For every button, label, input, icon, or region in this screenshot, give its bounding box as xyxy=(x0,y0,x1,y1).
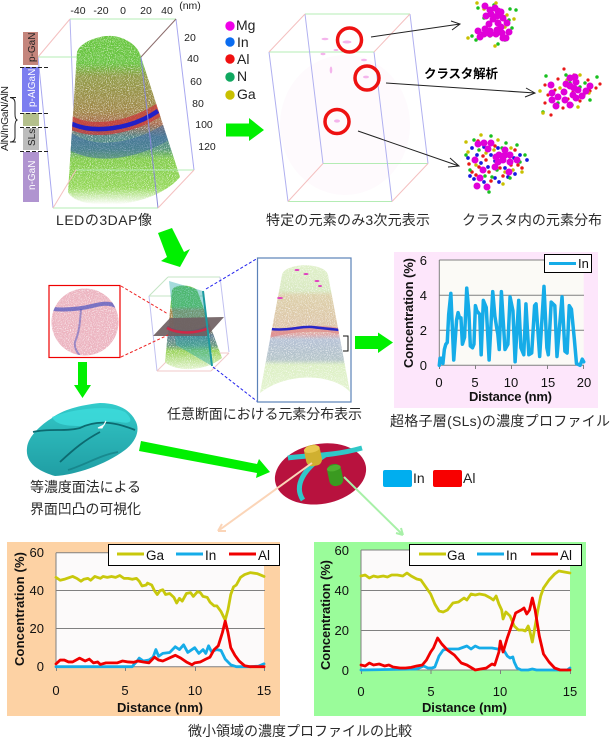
layer: SLs: SLs xyxy=(27,129,38,146)
x axis labels: 15 xyxy=(541,375,555,390)
legend xyxy=(108,544,280,566)
depth scale right: 120 xyxy=(198,141,216,153)
legend: Ga: Ga xyxy=(237,86,256,102)
chart: right profile xyxy=(314,542,586,716)
legend: Ga xyxy=(447,548,466,563)
x axis labels: 5 xyxy=(427,684,435,699)
x axis labels: 0 xyxy=(357,684,365,699)
y axis labels: 0 xyxy=(420,358,427,373)
quantum well bands xyxy=(66,106,170,151)
legend: Al xyxy=(258,548,270,563)
layer: p-AlGaN: p-AlGaN xyxy=(27,69,38,107)
y axis labels: 6 xyxy=(420,253,427,268)
highlights xyxy=(52,408,130,426)
depth scale top: 20 xyxy=(140,5,152,17)
panel: In Al disc with cylinders xyxy=(270,436,371,511)
panel background xyxy=(314,542,586,716)
panel: LED 3DAP image xyxy=(38,0,216,208)
element legend xyxy=(225,17,256,102)
y axis labels: 0 xyxy=(342,663,349,678)
y axis title: Concentration (%) xyxy=(318,560,333,670)
depth scale right: 60 xyxy=(190,76,202,88)
mini cone xyxy=(165,286,222,369)
depth scale top: (nm) xyxy=(179,0,201,12)
layer: n-GaN: n-GaN xyxy=(27,161,38,190)
y axis labels: 40 xyxy=(335,583,349,598)
layer: p-GaN: p-GaN xyxy=(27,33,38,62)
bounding box xyxy=(269,14,428,202)
Al line xyxy=(361,598,570,670)
disc xyxy=(52,288,118,356)
x axis title: Distance (nm) xyxy=(117,700,203,715)
legend: N: N xyxy=(237,68,247,84)
layer stack labels xyxy=(0,32,50,202)
T-shaped In signal xyxy=(53,304,116,356)
y axis labels xyxy=(335,543,349,678)
caption: LED 3DAP: LEDの3DAP像 xyxy=(56,212,152,228)
band details xyxy=(268,327,345,335)
dashed zoom lines xyxy=(121,258,258,402)
chart: SLs In concentration xyxy=(394,252,598,408)
layer: n-GaN xyxy=(23,152,39,202)
In line xyxy=(361,646,570,670)
x axis labels: 0 xyxy=(52,683,60,698)
x axis labels: 10 xyxy=(188,683,202,698)
depth scale top: 40 xyxy=(161,5,173,17)
slice band showing through xyxy=(167,328,209,332)
In band xyxy=(288,448,362,500)
right edge of vertical slice xyxy=(203,291,212,366)
caption: arbitrary cross section: 任意断面における元素分布表示 xyxy=(167,406,362,422)
Al line xyxy=(56,621,264,667)
y axis labels: 0 xyxy=(37,659,44,674)
y axis labels: 2 xyxy=(420,323,427,338)
panel: vertical slice zoom xyxy=(258,258,351,402)
legend: In: In xyxy=(237,34,249,50)
bracket xyxy=(10,98,17,142)
caption: iso-concentration: 等濃度面法による xyxy=(30,479,141,495)
legend xyxy=(410,544,582,566)
caption: cluster element distribution: クラスタ内の元素分布 xyxy=(462,212,602,228)
blue well line xyxy=(167,326,209,332)
depth scale right: 20 xyxy=(184,32,196,44)
depth scale top xyxy=(70,0,201,17)
x axis labels: 15 xyxy=(563,684,577,699)
faint Mg haze xyxy=(280,55,410,195)
caption: iso-concentration: 界面凹凸の可視化 xyxy=(30,501,141,517)
x axis labels xyxy=(357,684,577,699)
depth scale right: 100 xyxy=(195,119,213,131)
plot area xyxy=(439,260,584,365)
In line xyxy=(56,645,264,667)
chart: left profile xyxy=(7,542,280,716)
legend: Ga xyxy=(146,548,165,563)
cylinder: green xyxy=(326,463,344,487)
depth scale right: 40 xyxy=(187,53,199,65)
y axis title: Concentration (%) xyxy=(401,258,416,368)
arrow: surface to disc xyxy=(139,441,270,478)
panel background xyxy=(7,542,280,716)
plot area xyxy=(361,550,570,670)
caption: iso-concentration xyxy=(30,479,141,517)
Mg specks xyxy=(277,269,322,299)
bounding box back xyxy=(149,277,229,371)
horizontal slice xyxy=(153,317,224,336)
legend: In xyxy=(506,548,517,563)
legend: In xyxy=(205,548,216,563)
y axis labels xyxy=(30,545,44,674)
cluster 3 xyxy=(466,135,527,192)
legend: In xyxy=(578,256,589,271)
arrow: to element view xyxy=(226,118,264,141)
layer: AlN/InGaN/AlN xyxy=(23,113,39,126)
y axis labels: 60 xyxy=(30,545,44,560)
gridlines xyxy=(56,553,265,671)
Ga line xyxy=(56,573,264,620)
leader: disc to left chart xyxy=(218,463,312,531)
arrows to clusters xyxy=(358,21,535,167)
heading: cluster analysis: クラスタ解析 xyxy=(424,66,498,81)
y axis labels: 20 xyxy=(30,621,44,636)
caption: SLs profile: 超格子層(SLs)の濃度プロファイル xyxy=(390,413,610,429)
y axis labels: 60 xyxy=(335,543,349,558)
surface xyxy=(27,403,138,476)
x axis labels: 10 xyxy=(493,684,507,699)
legend: Mg: Mg xyxy=(236,17,255,33)
panel background xyxy=(394,252,598,408)
legend: Al: Al xyxy=(237,51,249,67)
x axis labels: 5 xyxy=(471,375,479,390)
x axis labels xyxy=(52,683,271,698)
In line xyxy=(439,286,584,365)
y axis labels: 4 xyxy=(420,288,427,303)
frame xyxy=(258,258,351,402)
plot area xyxy=(56,553,264,667)
cylinder: yellow xyxy=(303,444,323,467)
frame xyxy=(49,286,120,358)
arrow: disc to surface xyxy=(74,362,91,398)
x axis title: Distance (nm) xyxy=(469,389,552,404)
legend: In and Al surfaces xyxy=(383,470,475,487)
y axis title: Concentration (%) xyxy=(12,552,27,666)
depth scale top: -20 xyxy=(93,5,109,17)
bracket xyxy=(343,336,348,351)
disc xyxy=(270,436,371,511)
x axis labels: 0 xyxy=(435,375,443,390)
x axis title: Distance (nm) xyxy=(422,700,507,715)
Ga line xyxy=(361,571,570,642)
gridlines xyxy=(439,260,584,369)
vertical slice xyxy=(169,281,212,366)
layer: p-AlGaN xyxy=(22,67,39,112)
x axis labels: 5 xyxy=(121,683,129,698)
panel: Mg only 3D view xyxy=(269,14,428,202)
depth scale right xyxy=(184,32,216,153)
leader: disc to right chart xyxy=(344,477,403,535)
x axis labels: 20 xyxy=(577,375,591,390)
legend: Al: Al xyxy=(463,470,475,486)
Mg clusters xyxy=(320,38,369,123)
depth scale top: -40 xyxy=(70,5,86,17)
x axis labels: 10 xyxy=(504,375,518,390)
gridlines xyxy=(361,550,570,674)
legend: Al xyxy=(560,548,572,563)
panel: plan-view slice xyxy=(49,286,120,358)
creases xyxy=(33,423,135,470)
depth scale right: 80 xyxy=(192,98,204,110)
legend xyxy=(544,254,592,272)
caption: selected element view: 特定の元素のみ3次元表示 xyxy=(266,212,430,228)
legend: In: In xyxy=(413,470,425,486)
3D bounding box front xyxy=(38,19,194,208)
slice image xyxy=(260,265,350,393)
highlight circles xyxy=(325,28,379,134)
panel: iso-concentration surface xyxy=(27,403,138,476)
gap xyxy=(98,421,106,428)
x axis labels xyxy=(435,375,591,390)
x axis labels: 15 xyxy=(257,683,271,698)
3D bounding box back xyxy=(38,19,176,170)
atom probe cone xyxy=(68,36,180,204)
arrow: to SLs profile xyxy=(355,332,393,353)
y axis labels xyxy=(420,253,427,373)
layer dividers xyxy=(20,68,50,152)
cluster 1 xyxy=(468,3,516,46)
cluster 2 xyxy=(540,69,600,115)
layer: p-GaN xyxy=(23,32,38,65)
y axis labels: 40 xyxy=(30,583,44,598)
depth scale top: 0 xyxy=(120,5,126,17)
layer: SLs xyxy=(23,128,39,150)
panel: cross-section view xyxy=(149,277,229,371)
arrow: to cross sections xyxy=(158,228,190,267)
y axis labels: 20 xyxy=(335,623,349,638)
